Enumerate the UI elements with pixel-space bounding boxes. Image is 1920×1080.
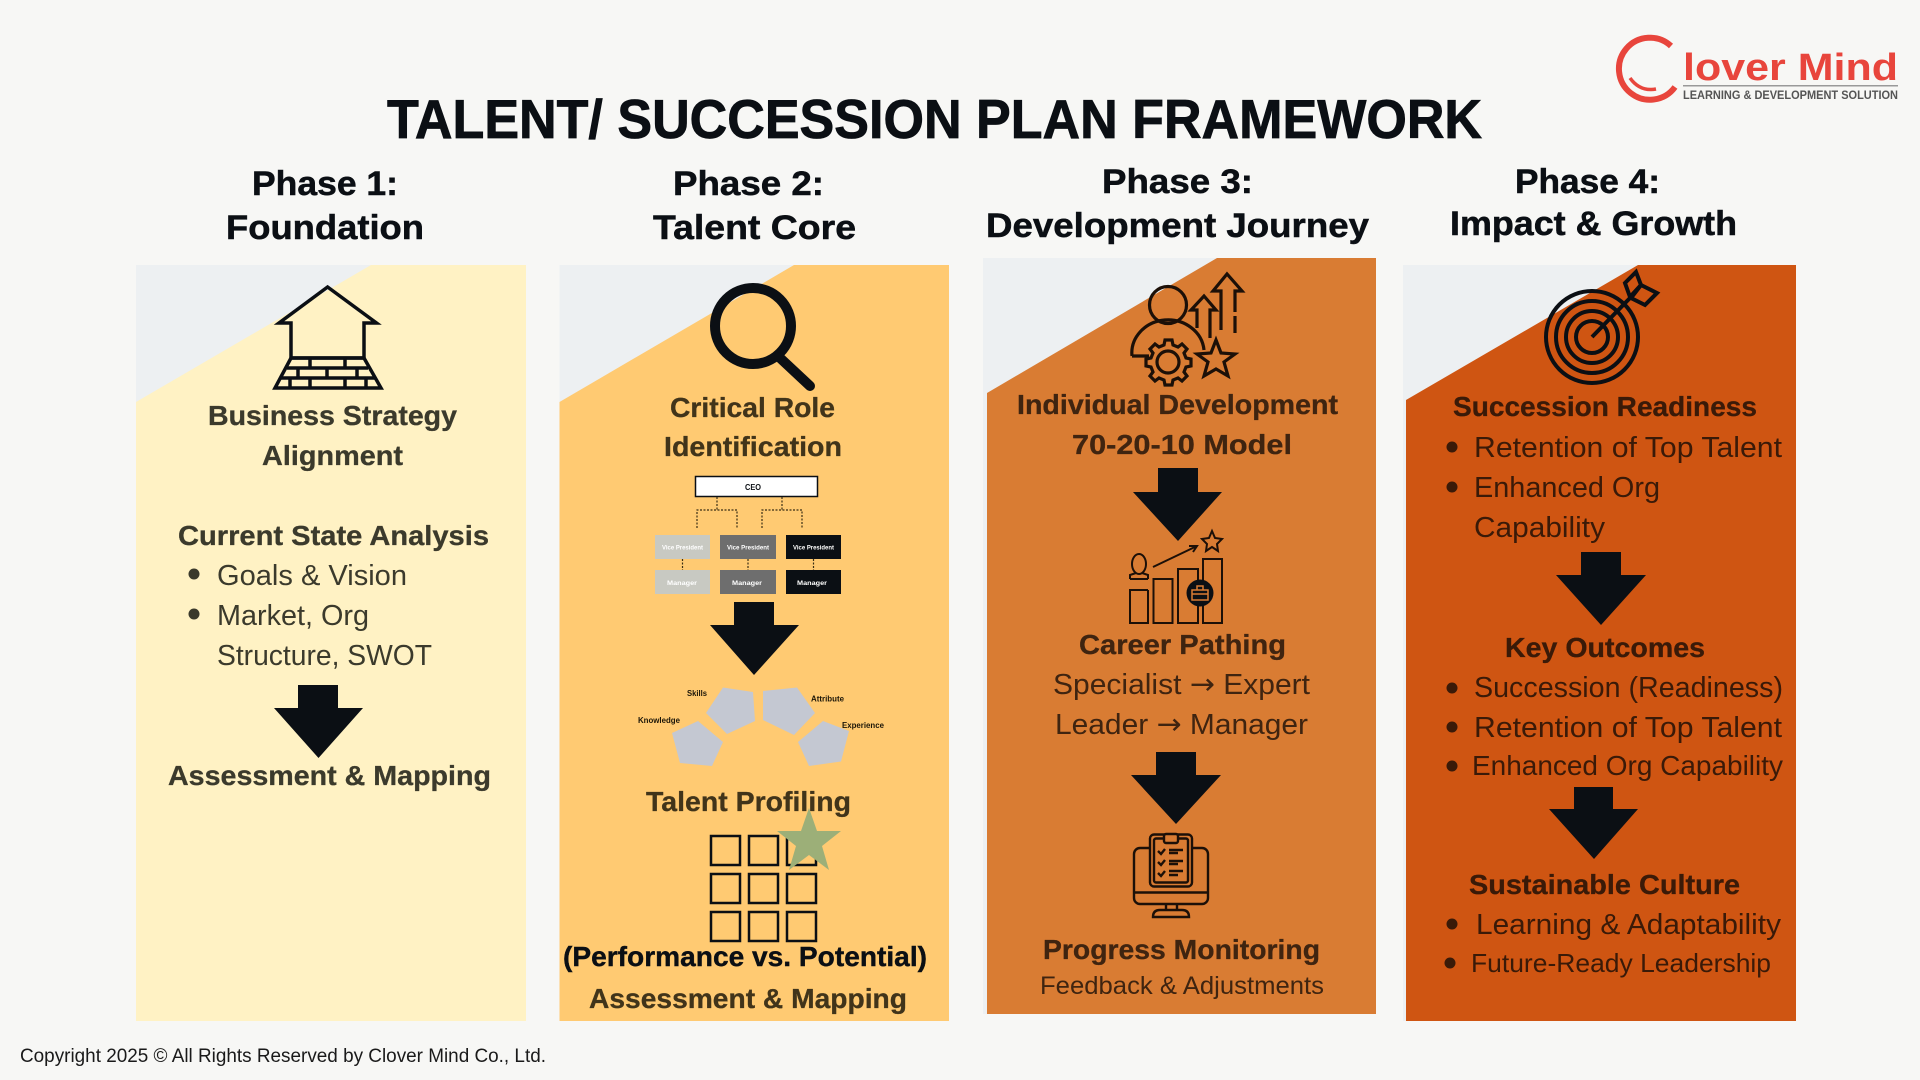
icon: magnifying glass (715, 288, 810, 386)
diagram: talent profile pentagons: Experience (842, 720, 884, 730)
diagram: talent profile pentagons: Attribute (811, 694, 844, 704)
logo: Clover Mind: LEARNING & DEVELOPMENT SOLUTION (1683, 90, 1898, 102)
text: current state analysis: Structure, SWOT (217, 640, 432, 672)
text: individual development (1017, 389, 1338, 460)
text: career pathing: Specialist → Expert (1053, 667, 1310, 701)
arrow: down (1133, 468, 1222, 541)
text: progress monitoring: Progress Monitoring (1043, 934, 1320, 965)
text: sustainable culture (1444, 869, 1782, 978)
text: succession readiness (1446, 391, 1782, 544)
diagram: talent profile pentagons: Skills (687, 688, 707, 698)
chart: organisation chart: Vice President (793, 544, 835, 552)
heading: phase 3 (986, 163, 1369, 245)
text: key outcomes: Succession (Readiness) (1474, 672, 1783, 704)
text: career pathing: Leader → Manager (1055, 707, 1308, 741)
text: sustainable culture: Future-Ready Leadership (1471, 948, 1771, 978)
text: critical role identification (664, 392, 842, 462)
text: succession readiness: Enhanced Org (1474, 472, 1660, 504)
arrow: down (1549, 787, 1638, 859)
chart: organisation chart: Manager (667, 580, 698, 587)
heading: phase 2: Phase 2: (673, 165, 824, 203)
heading: phase 4 (1450, 163, 1737, 243)
text: sustainable culture: Learning & Adaptability (1476, 909, 1782, 941)
heading: phase 3: Development Journey (986, 207, 1369, 245)
text: critical role identification: Critical Role (670, 392, 835, 423)
icon: career ladder bars (1130, 531, 1222, 623)
text: individual development: 70-20-10 Model (1072, 429, 1292, 460)
diagram: talent profile pentagons: Knowledge (638, 715, 680, 725)
icon: monitor with checklist (1134, 834, 1208, 917)
text: current state analysis: Current State Analysis (178, 520, 489, 551)
text: performance vs potential: (Performance vs. Potential) (563, 941, 927, 972)
icon: target with arrow (1546, 272, 1657, 383)
panel: phase 2 talent core (560, 265, 949, 1021)
text: career pathing: Career Pathing (1079, 629, 1286, 660)
panel: phase 3 development journey (983, 258, 1376, 1014)
text: progress monitoring (1040, 934, 1324, 1000)
text: individual development: Individual Development (1017, 389, 1338, 420)
text: business strategy alignment: Business Strategy (208, 400, 457, 431)
heading: phase 2: Talent Core (653, 209, 856, 247)
text: sustainable culture: Sustainable Culture (1469, 869, 1740, 900)
heading: phase 3: Phase 3: (1102, 163, 1253, 201)
text: business strategy alignment (208, 400, 457, 471)
text: succession readiness: Succession Readiness (1453, 391, 1757, 422)
arrow: down (274, 685, 363, 758)
title: TALENT/ SUCCESSION PLAN FRAMEWORK (387, 88, 1482, 150)
text: key outcomes (1446, 632, 1783, 781)
heading: phase 2 (653, 165, 856, 247)
text: key outcomes: Enhanced Org Capability (1472, 750, 1783, 781)
heading: phase 1 (226, 165, 424, 247)
text: current state analysis (178, 520, 489, 672)
text: career pathing (1053, 629, 1310, 741)
text: key outcomes: Retention of Top Talent (1474, 712, 1782, 744)
chart: organisation chart: Manager (797, 580, 828, 587)
text: assessment and mapping: Assessment & Mapping (168, 760, 491, 791)
chart: organisation chart: Vice President (662, 544, 704, 552)
text: succession readiness: Retention of Top Talent (1474, 432, 1782, 464)
text: talent profiling: Talent Profiling (646, 786, 851, 817)
icon: green star (777, 808, 841, 870)
heading: phase 4: Impact & Growth (1450, 205, 1737, 243)
text: assessment and mapping: Assessment & Mapping (589, 983, 907, 1014)
diagram: talent profile pentagons (638, 688, 884, 766)
heading: phase 4: Phase 4: (1515, 163, 1660, 201)
heading: phase 1: Phase 1: (252, 165, 398, 203)
chart: nine box grid (711, 836, 816, 941)
chart: organisation chart (655, 476, 841, 594)
panel: phase 1 foundation (136, 265, 526, 1021)
heading: phase 1: Foundation (226, 209, 424, 247)
text: succession readiness: Capability (1474, 512, 1606, 544)
arrow: down (710, 602, 799, 675)
text: critical role identification: Identification (664, 431, 842, 462)
icon: person with gear, star and arrows (1132, 274, 1242, 385)
text: key outcomes: Key Outcomes (1505, 632, 1705, 663)
arrow: down (1131, 752, 1221, 824)
logo: Clover Mind: lover Mind (1683, 47, 1898, 89)
text: progress monitoring: Feedback & Adjustments (1040, 972, 1324, 1000)
text: current state analysis: Goals & Vision (217, 560, 407, 592)
footer: copyright: Copyright 2025 © All Rights Reserved by Clover Mind Co., Ltd. (20, 1046, 546, 1067)
arrow: down (1556, 552, 1646, 625)
chart: organisation chart: CEO (745, 483, 761, 492)
text: current state analysis: Market, Org (217, 600, 369, 632)
chart: organisation chart: Vice President (727, 544, 770, 552)
chart: organisation chart: Manager (732, 580, 763, 587)
icon: house on brick foundation (275, 287, 381, 388)
logo: Clover Mind (1619, 38, 1898, 102)
text: business strategy alignment: Alignment (262, 440, 403, 471)
panel: phase 4 impact and growth (1403, 265, 1796, 1021)
